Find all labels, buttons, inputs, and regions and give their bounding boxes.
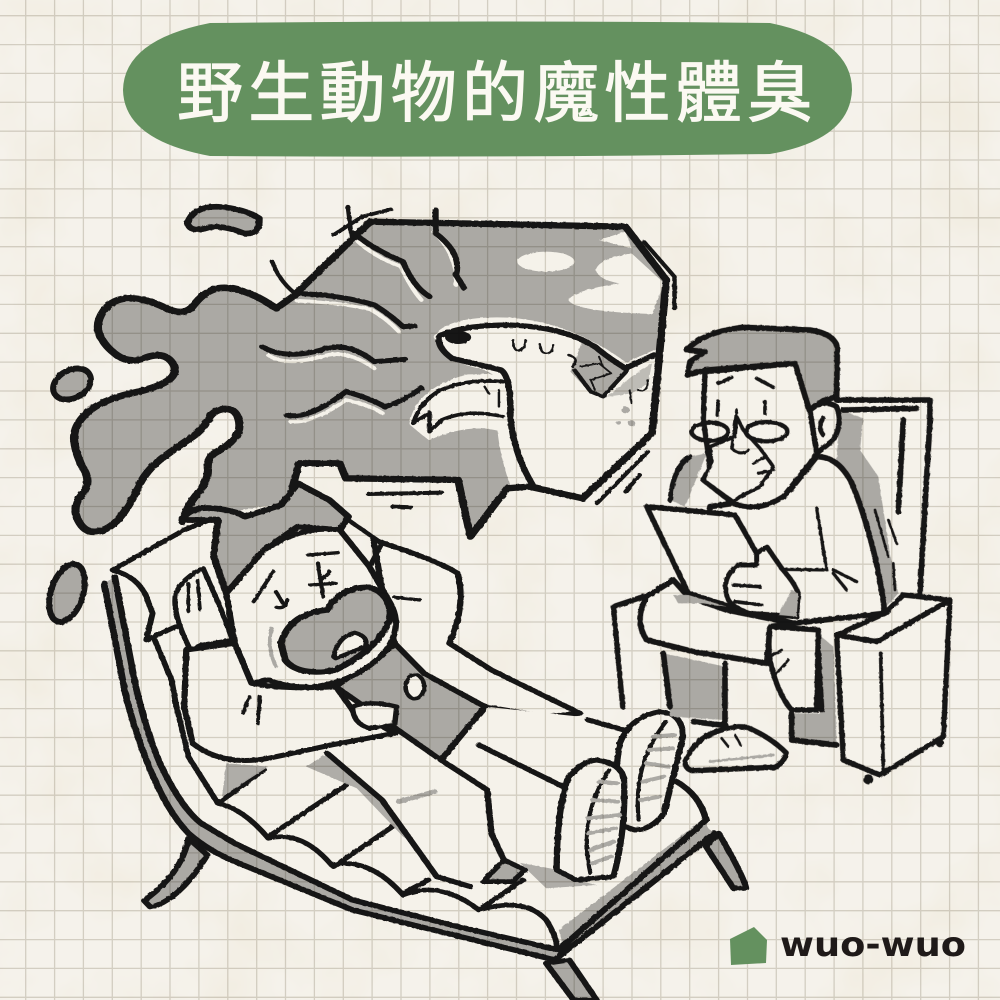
armchair arm and front [837, 600, 950, 775]
therapist and armchair [613, 327, 950, 784]
shoe sole far [615, 712, 683, 830]
splash blob lower left [43, 560, 91, 626]
dinosaur body [413, 320, 658, 497]
therapist legs gray [663, 653, 725, 720]
patient ear collar [348, 520, 382, 567]
logo: wordmark: wuo-wuo [780, 925, 966, 965]
splash blob top [187, 207, 259, 233]
dinosaur nostril marks [485, 340, 576, 407]
patient arm behind head [374, 540, 580, 717]
marks under bubble [368, 493, 442, 507]
armchair left arm [613, 597, 643, 707]
patient sock [483, 860, 525, 882]
clipboard shadow [673, 595, 727, 607]
drop on belly [406, 675, 424, 699]
wavy smell lines [262, 210, 464, 416]
patient tongue [334, 633, 366, 658]
chaise longue and patient [104, 483, 746, 1000]
therapist far pant [792, 630, 837, 743]
title text: 野生動物的魔性體臭 [177, 56, 813, 130]
therapist hair [687, 327, 837, 410]
dinosaur eye [445, 331, 471, 344]
therapist near knee [640, 580, 793, 663]
cushion shadows [222, 753, 597, 888]
patient hand on belly [353, 703, 397, 728]
therapist ear [810, 403, 839, 453]
chaise legs [144, 833, 746, 1000]
wavy smell line halos [268, 232, 456, 422]
chaise cushion folds [113, 517, 557, 947]
dinosaur scales [570, 340, 630, 398]
bubble gray fill [74, 223, 666, 537]
armchair back [837, 400, 930, 620]
therapist face [703, 363, 817, 507]
logo: house icon [730, 927, 767, 965]
armchair arm top [837, 595, 950, 642]
illustration [43, 207, 950, 1000]
armchair left back [670, 453, 707, 507]
armchair wheels [863, 739, 944, 784]
chaise base [113, 517, 715, 958]
bubble outline [276, 222, 666, 537]
splash blob left [48, 362, 96, 406]
title banner [123, 22, 852, 157]
splat outline [74, 288, 276, 532]
patient brows and eyes [254, 553, 420, 608]
chaise frame gray band [104, 577, 715, 958]
therapist hand pinching nose [703, 417, 773, 502]
therapist torso [688, 457, 885, 623]
patient legs [327, 707, 626, 887]
speech bubble with dinosaur and splat [74, 207, 674, 537]
patient torso [336, 643, 485, 760]
therapist far knee [769, 627, 818, 710]
patient hand at head [175, 568, 233, 650]
chaise frame outlines [104, 577, 715, 960]
clipboard [647, 507, 770, 607]
therapist hand on clipboard [726, 547, 798, 617]
therapist brows and eyes [717, 377, 773, 415]
therapist glasses [692, 422, 787, 441]
dinosaur outline [439, 325, 654, 487]
patient face [226, 529, 396, 687]
shoe sole near [557, 760, 624, 880]
patient mouth [281, 587, 390, 672]
clouds [517, 232, 664, 314]
patient near arm [184, 643, 395, 760]
impact cross lines [272, 207, 674, 503]
patient hair [182, 483, 348, 593]
therapist shoe [685, 727, 787, 771]
